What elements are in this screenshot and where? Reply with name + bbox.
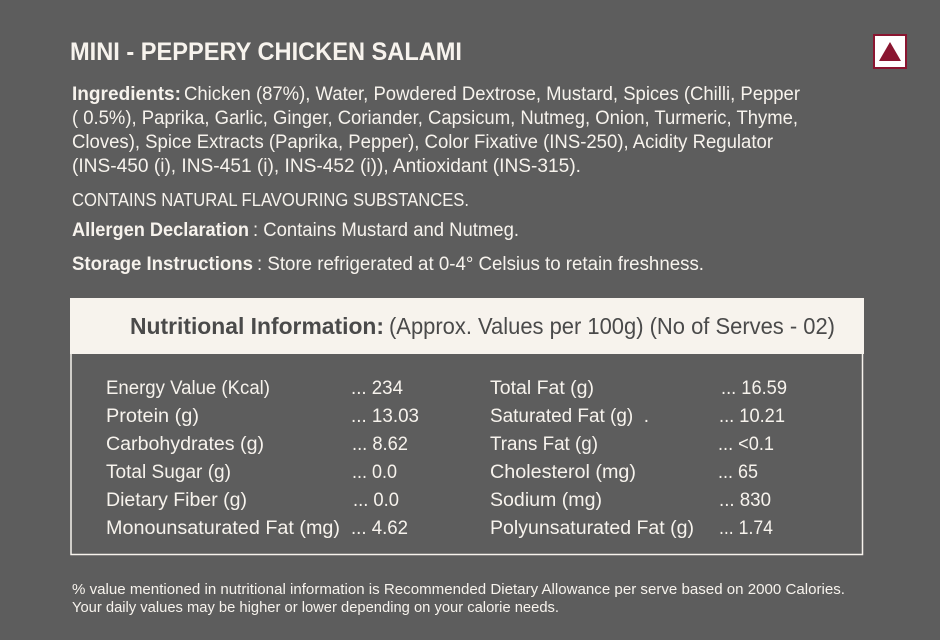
right nutrient values: ... 65: [718, 462, 758, 483]
left nutrient labels: Energy Value (Kcal): [106, 378, 270, 399]
left nutrient labels: Total Sugar (g): [106, 462, 231, 483]
left nutrient labels: Protein (g): [106, 406, 199, 427]
left nutrient values: [351, 378, 419, 539]
left nutrient labels: [106, 378, 340, 539]
right nutrient labels: Sodium (mg): [490, 490, 602, 511]
allergen declaration: [72, 220, 519, 241]
storage instructions: Storage Instructions: [72, 254, 253, 275]
ingredients text block: (INS-450 (i), INS-451 (i), INS-452 (i)), Antioxidant (INS-315).: [72, 156, 581, 177]
left nutrient values: ... 4.62: [351, 518, 408, 539]
footnote: [72, 581, 845, 616]
allergen declaration: : Contains Mustard and Nutmeg.: [253, 220, 519, 241]
panel header: [70, 298, 864, 354]
icon: non-vegetarian mark: [874, 35, 906, 68]
right nutrient values: ... <0.1: [718, 434, 774, 455]
right nutrient labels: Trans Fat (g): [490, 434, 598, 455]
right nutrient values: [718, 378, 787, 539]
storage instructions: [72, 254, 704, 275]
right nutrient labels: Polyunsaturated Fat (g): [490, 518, 694, 539]
ingredients text block: Ingredients:: [72, 84, 181, 105]
allergen declaration: Allergen Declaration: [72, 220, 249, 241]
left nutrient values: ... 0.0: [352, 462, 397, 483]
ingredients text block: ( 0.5%), Paprika, Garlic, Ginger, Coriander, Capsicum, Nutmeg, Onion, Turmeric, Thyme,: [72, 108, 798, 129]
right nutrient labels: Total Fat (g): [490, 378, 594, 399]
ingredients text block: Cloves), Spice Extracts (Paprika, Pepper), Color Fixative (INS-250), Acidity Regulator: [72, 132, 774, 153]
right nutrient values: ... 830: [719, 490, 771, 511]
left nutrient values: ... 0.0: [353, 490, 399, 511]
left nutrient labels: Monounsaturated Fat (mg): [106, 518, 340, 539]
panel header: (Approx. Values per 100g) (No of Serves - 02): [389, 313, 835, 339]
natural flavouring statement: CONTAINS NATURAL FLAVOURING SUBSTANCES.: [72, 190, 469, 210]
left nutrient values: ... 234: [351, 378, 403, 399]
right nutrient values: ... 16.59: [721, 378, 787, 399]
footnote: Your daily values may be higher or lower depending on your calorie needs.: [72, 599, 559, 616]
left nutrient labels: Dietary Fiber (g): [106, 490, 247, 511]
panel: nutritional information: [70, 298, 864, 554]
ingredients text block: [72, 84, 801, 177]
left nutrient labels: Carbohydrates (g): [106, 434, 264, 455]
left nutrient values: ... 8.62: [352, 434, 408, 455]
right nutrient values: ... 1.74: [719, 518, 773, 539]
right nutrient labels: [490, 378, 694, 539]
right nutrient labels: Cholesterol (mg): [490, 462, 636, 483]
storage instructions: : Store refrigerated at 0-4° Celsius to retain freshness.: [257, 254, 704, 275]
ingredients text block: Chicken (87%), Water, Powdered Dextrose, Mustard, Spices (Chilli, Pepper: [184, 84, 801, 105]
right nutrient values: ... 10.21: [719, 406, 785, 427]
title: MINI - PEPPERY CHICKEN SALAMI: [70, 38, 462, 66]
footnote: % value mentioned in nutritional information is Recommended Dietary Allowance per serve based on 2000 Calories.: [72, 581, 845, 598]
right nutrient labels: Saturated Fat (g) .: [490, 406, 649, 427]
panel header: Nutritional Information:: [130, 313, 384, 339]
left nutrient values: ... 13.03: [351, 406, 419, 427]
